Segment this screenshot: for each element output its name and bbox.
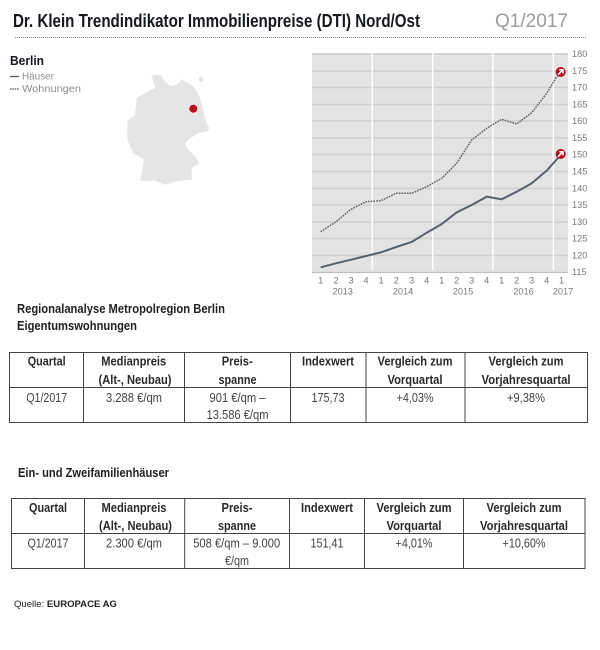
table header: Vergleich zum xyxy=(376,501,452,515)
table header: Vergleich zum xyxy=(378,354,452,368)
table row: 13.586 €/qm xyxy=(206,408,268,422)
x axis labels xyxy=(318,276,573,296)
table header: Indexwert xyxy=(302,354,355,368)
x axis labels: 1 xyxy=(318,276,323,286)
region heading: Berlin: Berlin xyxy=(10,54,44,68)
x axis labels: 2013 xyxy=(332,286,353,296)
table row: €/qm xyxy=(225,554,249,568)
y axis labels: 140 xyxy=(572,184,587,194)
x axis labels: 2014 xyxy=(393,286,413,296)
y axis labels: 165 xyxy=(572,100,587,110)
y axis labels: 145 xyxy=(572,166,587,176)
table: Eigentumswohnungen xyxy=(10,352,588,422)
line chart xyxy=(312,49,587,296)
x axis labels: 1 xyxy=(378,276,384,286)
table header: Vorquartal xyxy=(386,519,442,533)
table header: Vergleich zum xyxy=(488,354,564,368)
heading: Ein- und Zweifamilienhäuser: Ein- und Zweifamilienhäuser xyxy=(18,466,169,480)
x axis labels: 2 xyxy=(514,276,519,286)
island xyxy=(199,77,203,82)
x axis labels: 2017 xyxy=(553,286,573,296)
table row: +9,38% xyxy=(507,391,545,405)
table header: spanne xyxy=(218,519,256,533)
table header: Vorjahresquartal xyxy=(480,519,568,533)
y axis labels: 170 xyxy=(572,82,587,92)
legend xyxy=(10,72,81,95)
table header xyxy=(29,501,568,533)
table header: Vorquartal xyxy=(388,373,442,387)
y axis labels: 150 xyxy=(572,150,587,160)
x axis labels: 2 xyxy=(333,276,339,286)
table row: 175,73 xyxy=(312,391,345,405)
y axis labels: 115 xyxy=(572,267,587,277)
table row xyxy=(28,536,546,568)
legend: Wohnungen: Wohnungen xyxy=(22,84,81,95)
x axis labels: 4 xyxy=(363,276,369,286)
line: Wohnungen xyxy=(321,72,561,232)
source note: Quelle: EUROPACE AG xyxy=(14,599,117,610)
x axis labels: 4 xyxy=(484,276,489,286)
table header: Medianpreis xyxy=(102,501,167,515)
table row: +4,03% xyxy=(396,391,434,405)
x axis labels: 3 xyxy=(409,276,414,286)
table header: (Alt-, Neubau) xyxy=(98,373,172,387)
table row: Q1/2017 xyxy=(28,536,69,550)
table row: 2.300 €/qm xyxy=(106,536,162,550)
table header: Quartal xyxy=(28,354,66,368)
table header: Vorjahresquartal xyxy=(482,373,570,387)
x axis labels: 3 xyxy=(529,276,534,286)
line: Häuser xyxy=(321,155,561,267)
map shape xyxy=(127,75,209,185)
icon: up arrow Wohnungen xyxy=(556,67,566,77)
map of Germany with Berlin marker xyxy=(127,75,209,185)
y axis labels: 160 xyxy=(572,116,587,126)
table row: 151,41 xyxy=(310,536,344,550)
table header xyxy=(28,354,570,387)
table header: Quartal xyxy=(29,501,67,515)
table row: 508 €/qm – 9.000 xyxy=(193,536,280,550)
icon: up arrow Häuser xyxy=(556,149,566,159)
table header: (Alt-, Neubau) xyxy=(99,519,172,533)
y axis labels: 180 xyxy=(572,49,587,59)
x axis labels: 4 xyxy=(424,276,429,286)
x axis labels: 2 xyxy=(394,276,399,286)
y axis labels: 130 xyxy=(572,217,587,227)
x axis labels: 1 xyxy=(559,276,564,286)
title: Dr. Klein Trendindikator Immobilienpreise (DTI) Nord/Ost xyxy=(13,11,420,31)
x axis labels: 1 xyxy=(499,276,504,286)
y axis labels: 175 xyxy=(572,66,587,76)
table row: 901 €/qm – xyxy=(210,391,266,405)
table header: spanne xyxy=(218,373,257,387)
table row: Q1/2017 xyxy=(26,391,67,405)
x axis labels: 4 xyxy=(544,276,549,286)
table header: Preis- xyxy=(222,354,253,368)
x axis labels: 2016 xyxy=(513,286,534,296)
y axis labels xyxy=(572,49,587,277)
x axis labels: 3 xyxy=(469,276,474,286)
table header: Indexwert xyxy=(301,501,354,515)
x axis labels: 2 xyxy=(454,276,459,286)
y axis labels: 120 xyxy=(572,250,587,260)
table row: 3.288 €/qm xyxy=(106,391,162,405)
x axis labels: 3 xyxy=(348,276,354,286)
x axis labels: 1 xyxy=(439,276,444,286)
legend: Häuser: Häuser xyxy=(22,72,55,82)
table row: +4,01% xyxy=(396,536,432,550)
x axis labels: 2015 xyxy=(453,286,473,296)
y axis labels: 125 xyxy=(572,234,587,244)
plot background xyxy=(312,53,568,272)
table row: +10,60% xyxy=(502,536,546,550)
Berlin marker xyxy=(188,103,199,114)
y axis labels: 155 xyxy=(572,133,587,143)
quarter label: Q1/2017 xyxy=(495,11,568,32)
table row xyxy=(26,391,545,422)
table header: Preis- xyxy=(222,501,252,515)
heading: Regionalanalyse: Regionalanalyse Metropolregion Berlin xyxy=(17,302,225,316)
table: Häuser xyxy=(12,498,585,568)
heading: Eigentumswohnungen: Eigentumswohnungen xyxy=(17,319,137,333)
table header: Medianpreis xyxy=(101,354,166,368)
table header: Vergleich zum xyxy=(486,501,562,515)
y axis labels: 135 xyxy=(572,200,587,210)
